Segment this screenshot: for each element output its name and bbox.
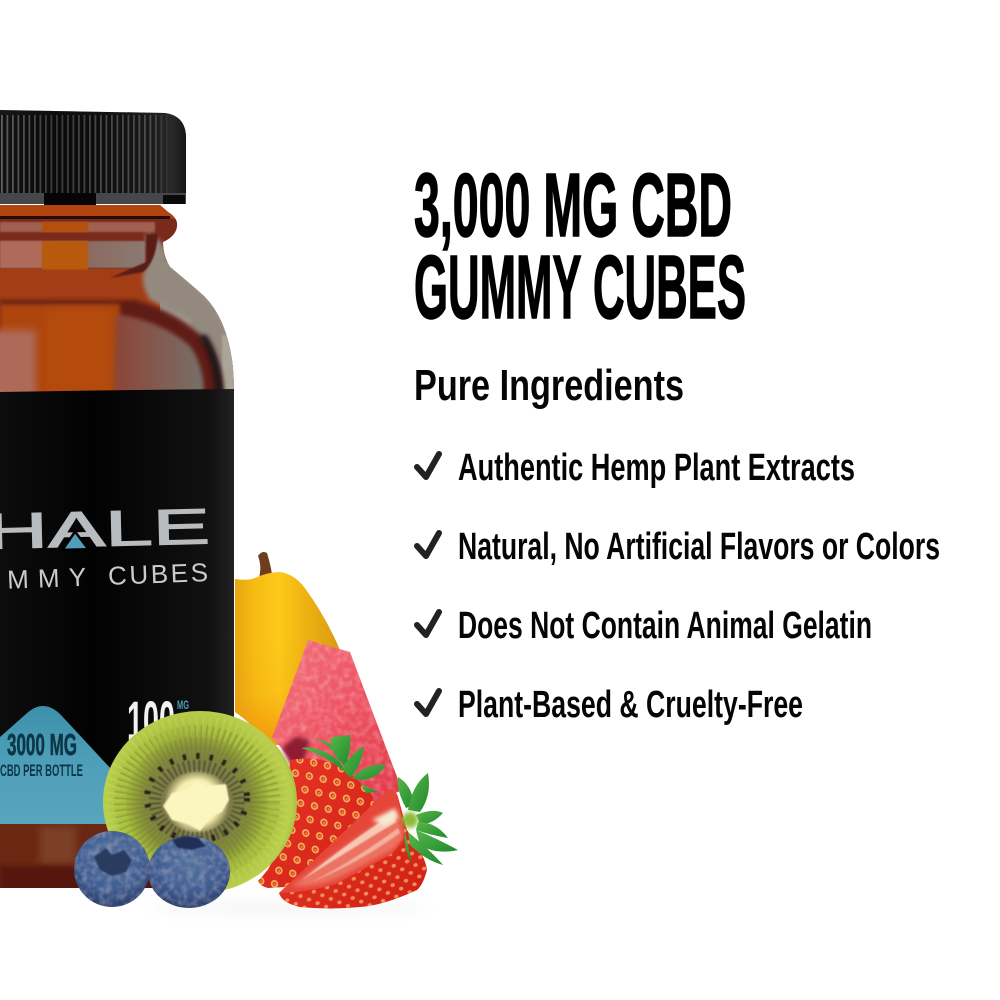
icon: left blueberry [74, 831, 150, 907]
product bottle [0, 110, 242, 895]
cut strawberry leaves [398, 773, 458, 865]
product name: gummy cubes: CUBES [107, 557, 209, 591]
product name: gummy cubes [7, 557, 209, 595]
icon: right blueberry [148, 836, 230, 908]
black label [0, 389, 234, 823]
dosage: 100 mg: 100 [127, 689, 175, 752]
fruit cluster [74, 552, 458, 913]
dosage: 100 mg: MG [177, 698, 189, 712]
icon: kiwi slice [103, 711, 297, 893]
item: plant-based: Plant-Based & Cruelty-Free [458, 684, 803, 726]
badge text: cbd per bottle: CBD PER BOTTLE [0, 761, 83, 780]
icon: back strawberry [258, 735, 386, 888]
shoulder grey band [160, 262, 234, 380]
badge text: 3000 mg: 3000 MG [7, 727, 77, 762]
icon: watermelon slice [272, 640, 402, 806]
product name: gummy cubes: MMY [7, 562, 87, 595]
bottle glass [0, 205, 242, 895]
subheading: Pure Ingredients [414, 361, 684, 410]
icon: pear [235, 552, 340, 745]
blue badge [0, 706, 112, 824]
item: plant-based [417, 684, 803, 726]
bottle cap [0, 110, 186, 205]
title [414, 156, 746, 338]
icon: cut strawberry [279, 773, 458, 908]
ground shadow [150, 903, 430, 913]
dosage: 100 mg [127, 689, 189, 752]
checklist [417, 447, 940, 726]
back strawberry leaves [301, 735, 386, 793]
logo: HALE [0, 498, 211, 560]
cut face [279, 790, 404, 893]
item: authentic hemp: Authentic Hemp Plant Extracts [458, 447, 855, 489]
item: authentic hemp [417, 447, 855, 489]
